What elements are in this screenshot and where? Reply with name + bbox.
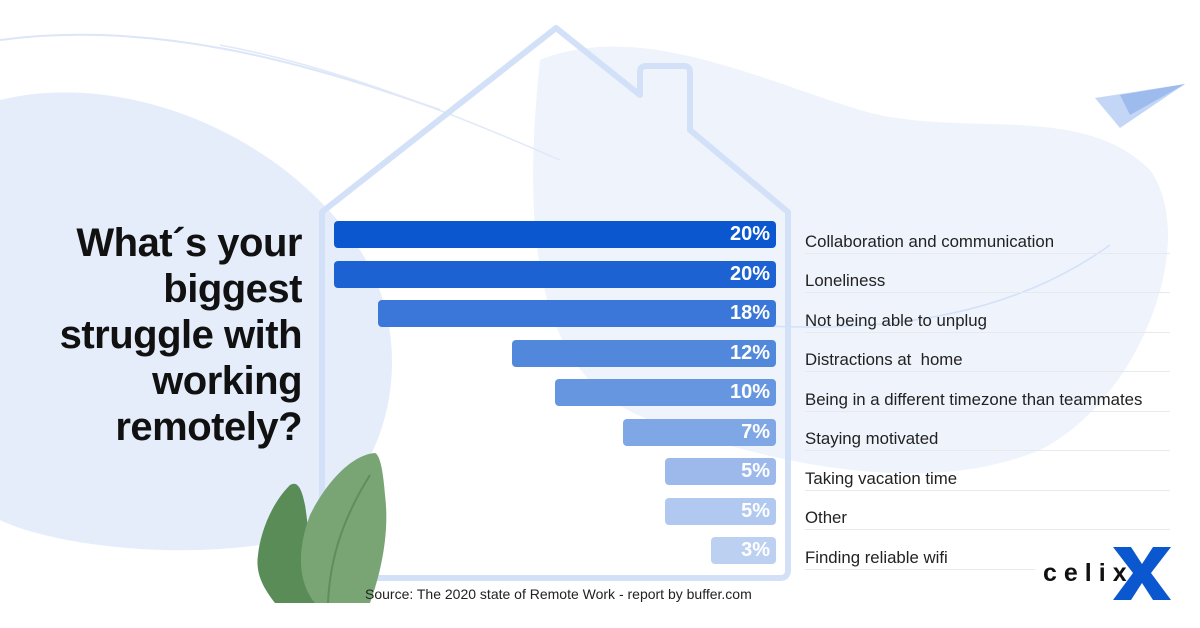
bar chart: 20% xyxy=(730,223,770,245)
bar chart: 20% xyxy=(730,263,770,285)
labels: Taking vacation time xyxy=(805,469,957,488)
icon: plant xyxy=(257,453,386,603)
bar chart: 12% xyxy=(730,342,770,364)
logo: celix: celix xyxy=(1043,559,1134,587)
bar chart: 18% xyxy=(730,302,770,324)
labels: Staying motivated xyxy=(805,429,938,448)
bar chart: 5% xyxy=(741,460,770,482)
labels: Collaboration and communication xyxy=(805,232,1054,251)
labels: Loneliness xyxy=(805,271,885,290)
house outline xyxy=(322,28,788,578)
title: remotely? xyxy=(115,405,302,449)
labels: Other xyxy=(805,508,847,527)
title: working xyxy=(152,359,302,403)
logo: celix xyxy=(1043,547,1171,600)
labels: Distractions at home xyxy=(805,350,963,369)
title: struggle with xyxy=(60,313,302,357)
bar chart: 5% xyxy=(741,500,770,522)
bar chart: 3% xyxy=(741,539,770,561)
title xyxy=(60,221,302,449)
bar chart: 7% xyxy=(741,421,770,443)
labels: Being in a different timezone than teammates xyxy=(805,390,1142,409)
labels: Finding reliable wifi xyxy=(805,548,948,567)
title: biggest xyxy=(163,267,302,311)
icon: paper plane xyxy=(1095,84,1185,128)
title: What´s your xyxy=(76,221,302,265)
labels: Not being able to unplug xyxy=(805,311,987,330)
source: Source: The 2020 state of Remote Work - report by buffer.com xyxy=(365,586,752,602)
bar chart: 10% xyxy=(730,381,770,403)
